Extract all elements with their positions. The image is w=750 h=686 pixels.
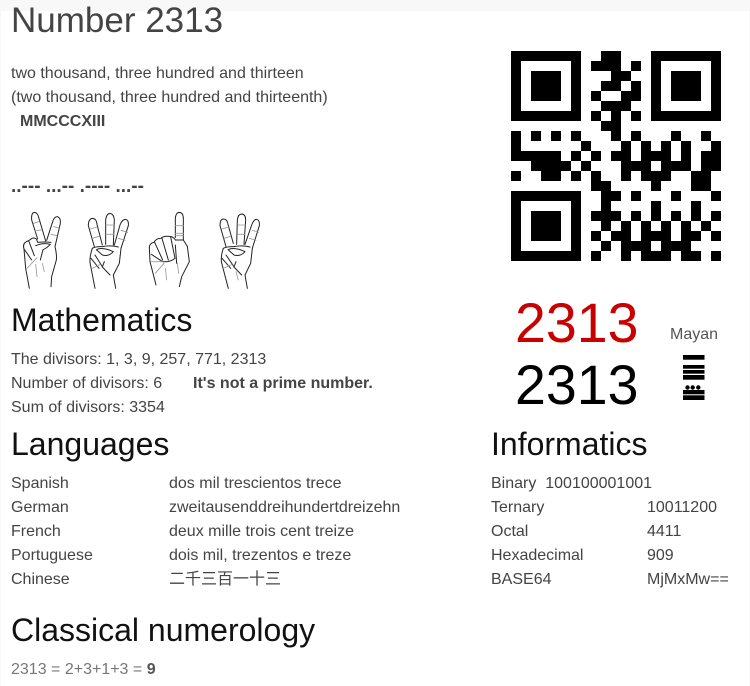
icon: Mayan numeral (683, 355, 704, 400)
informatics table: 10011200 (647, 499, 717, 516)
languages table: zweitausenddreihundertdreizehn (169, 499, 400, 516)
mathematics facts: It's not a prime number. (193, 375, 373, 392)
number names and roman numeral: two thousand, three hundred and thirteen (11, 65, 304, 82)
sign language hands (23, 212, 260, 289)
informatics table: BASE64 (491, 571, 551, 588)
number names and roman numeral: MMCCCXIII (20, 113, 105, 130)
mathematics facts (11, 351, 373, 416)
informatics table: Binary 100100001001 (491, 475, 652, 492)
languages table: Chinese (11, 571, 70, 588)
informatics table: 4411 (647, 523, 681, 540)
informatics table: Hexadecimal (491, 547, 583, 564)
informatics table (491, 475, 729, 588)
languages table: German (11, 499, 69, 516)
icon: hand one (149, 212, 189, 287)
morse code: ..--- ...-- .---- ...-- (11, 176, 144, 197)
languages table: deux mille trois cent treize (169, 523, 354, 540)
heading: Mathematics: Mathematics (11, 302, 192, 338)
languages table: Portuguese (11, 547, 93, 564)
heading: Languages: Languages (11, 426, 169, 462)
Mayan label: Mayan (670, 326, 718, 343)
heading: Classical numerology: Classical numerology (11, 612, 315, 648)
icon: hand three (220, 214, 259, 288)
informatics table: Octal (491, 523, 528, 540)
languages table: dos mil trescientos trece (169, 475, 342, 492)
informatics table: Ternary (491, 499, 544, 516)
languages table: dois mil, trezentos e treze (169, 547, 351, 564)
number names and roman numeral (11, 65, 328, 130)
icon: hand two (24, 212, 60, 288)
languages table: 二千三百一十三 (169, 571, 281, 588)
languages table (11, 475, 400, 588)
mathematics facts: The divisors: 1, 3, 9, 257, 771, 2313 (11, 351, 266, 368)
number names and roman numeral: (two thousand, three hundred and thirteenth) (11, 89, 328, 106)
informatics table: 909 (647, 547, 674, 564)
QR code (511, 51, 721, 261)
mathematics facts: Number of divisors: 6 (11, 375, 162, 392)
title: Number 2313 (11, 1, 223, 40)
languages table: French (11, 523, 61, 540)
icon: hand three (88, 213, 128, 288)
numerology sum: 2313 = 2+3+1+3 = 9 (11, 661, 156, 678)
heading: Informatics: Informatics (491, 426, 647, 462)
mathematics facts: Sum of divisors: 3354 (11, 399, 165, 416)
languages table: Spanish (11, 475, 69, 492)
black number: 2313 (515, 354, 638, 416)
red number: 2313 (515, 292, 638, 354)
informatics table: MjMxMw== (647, 571, 729, 588)
